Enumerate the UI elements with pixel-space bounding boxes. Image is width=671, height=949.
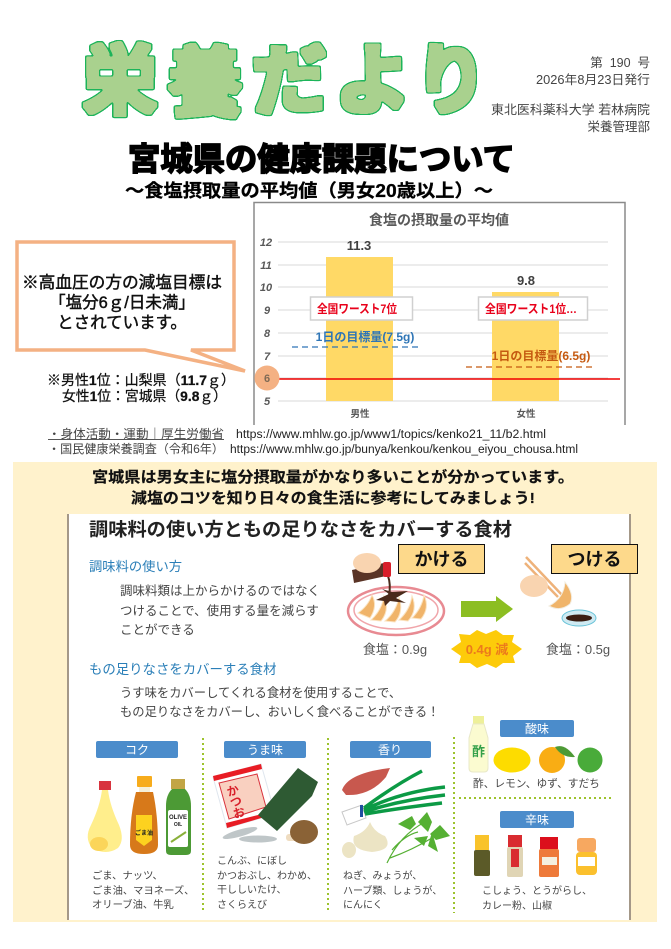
- salt values: [363, 642, 610, 657]
- arrow: green: [461, 596, 513, 622]
- koku foods: ごま油、マヨネーズ、: [92, 884, 194, 897]
- icon: yuzu: [539, 746, 575, 773]
- section: how to use seasoning: [89, 558, 320, 637]
- koku foods: [92, 869, 194, 911]
- spicy foods: カレー粉、山椒: [482, 899, 552, 912]
- koku foods: オリーブ油、牛乳: [92, 898, 174, 911]
- y axis labels: 9: [264, 305, 271, 317]
- icon: kombu: [258, 768, 318, 831]
- icon: katsuobushi pack: つ: [228, 794, 244, 810]
- category: sour: 酸味: [525, 722, 549, 736]
- bar: male 11.3: 11.3: [347, 238, 371, 253]
- rank label: female: 全国ワースト1位…: [485, 301, 577, 316]
- marker circle: 6: 6: [264, 373, 270, 385]
- source links: ・国民健康栄養調査（令和6年）: [48, 441, 224, 456]
- callout: hypertension salt target: [17, 242, 245, 371]
- category: umami: [213, 741, 318, 911]
- target dashed line: male: 1日の目標量(7.5g): [316, 329, 414, 344]
- marker circle: 6: [254, 366, 280, 390]
- salt values: 食塩：0.9g: [363, 642, 427, 657]
- koku foods: ごま、ナッツ、: [92, 869, 163, 882]
- category: aroma: [342, 741, 450, 911]
- icon: black pepper: [474, 835, 490, 876]
- aroma foods: にんにく: [343, 899, 383, 911]
- icon: garlic: [342, 822, 388, 858]
- title: newsletter masthead: [83, 37, 487, 127]
- dotted dividers: [203, 737, 612, 913]
- icon: olive oil: [166, 779, 191, 855]
- advice message: [92, 468, 574, 507]
- source links: [48, 426, 578, 456]
- icon: curry powder: [576, 838, 597, 875]
- bar: male 11.3: [326, 238, 393, 420]
- bar: female 9.8: [492, 273, 559, 420]
- y axis labels: [260, 237, 273, 408]
- icon: sesame oil: ごま油: [135, 829, 153, 837]
- icon: spice jar: [539, 837, 559, 877]
- advice message: 減塩のコツを知り日々の食生活に参考にしてみましょう!: [131, 489, 535, 507]
- icon: olive oil: OLIVE: [169, 815, 187, 821]
- y axis labels: 12: [260, 237, 272, 249]
- issue info: 栄養管理部: [587, 119, 650, 134]
- y axis labels: 10: [260, 282, 273, 294]
- rank label: male: 全国ワースト7位: [317, 301, 397, 316]
- illustration: gyoza with sauce poured: [348, 553, 444, 635]
- callout: hypertension salt target: ※高血圧の方の減塩目標は: [22, 273, 222, 292]
- note: top prefectures: [47, 372, 235, 405]
- category: spicy: [474, 811, 597, 912]
- category: koku: [88, 741, 194, 911]
- issue info: 第 190 号: [590, 55, 650, 70]
- spicy foods: こしょう、とうがらし、: [482, 884, 592, 897]
- sour foods: 酢、レモン、ゆず、すだち: [473, 777, 600, 790]
- category: spicy: 辛味: [525, 813, 549, 827]
- title: newsletter masthead: り: [415, 39, 487, 124]
- umami foods: 干ししいたけ、: [217, 884, 286, 896]
- icon: dried sardines: [222, 825, 277, 842]
- umami foods: かつおぶし、わかめ、: [217, 870, 317, 882]
- source links: https://www.mhlw.go.jp/www1/topics/kenko21_11/b2.html: [236, 429, 546, 441]
- note: top prefectures: ※男性1位：山梨県（11.7ｇ）: [47, 372, 235, 389]
- red line at 6 g: [278, 378, 620, 380]
- icon: herb: [387, 812, 450, 863]
- umami foods: [217, 855, 317, 911]
- icon: lemon: [494, 748, 530, 772]
- badge: 0.4g reduction: 0.4g 減: [466, 642, 508, 657]
- aroma foods: ねぎ、みょうが、: [343, 869, 422, 882]
- bar: female 9.8: 女性: [516, 408, 536, 420]
- section: how to use seasoning: ことができる: [120, 622, 195, 637]
- target dashed line: female: [466, 348, 592, 367]
- label: kakeru: [398, 544, 484, 574]
- source links: ・身体活動・運動｜厚生労働省: [48, 426, 224, 441]
- icon: katsuobushi pack: お: [231, 805, 247, 821]
- category: koku: コク: [125, 743, 149, 757]
- section: how to use seasoning: 調味料の使い方: [89, 558, 182, 574]
- advice message: 宮城県は男女主に塩分摂取量がかなり多いことが分かっています。: [92, 468, 574, 486]
- heading: 宮城県の健康課題について: [128, 141, 515, 177]
- panel: advice background: [13, 462, 657, 922]
- label: kakeru: かける: [414, 550, 468, 570]
- guide title: 調味料の使い方ともの足りなさをカバーする食材: [89, 519, 512, 540]
- icon: mayonnaise: [88, 781, 122, 852]
- category: sour: [469, 716, 602, 790]
- title: newsletter masthead: よ: [335, 39, 411, 124]
- callout: hypertension salt target: 「塩分6ｇ/日未満」: [49, 293, 195, 312]
- section: covering blandness: もの足りなさをカバーし、おいしく食べることができる！: [120, 704, 439, 719]
- icon: katsuobushi pack: [213, 764, 275, 828]
- y axis labels: 11: [260, 260, 272, 272]
- label: tsukeru: [552, 544, 638, 574]
- icon: shiitake: [286, 820, 318, 844]
- icon: katsuobushi pack: か: [225, 783, 241, 799]
- icon: vinegar bottle: 酢: [472, 744, 485, 759]
- icon: olive oil: OIL: [174, 822, 182, 828]
- issue info: [491, 55, 650, 134]
- illustration: gyoza dipped in sauce: [520, 557, 596, 626]
- y axis labels: 7: [264, 351, 271, 363]
- bar chart: salt intake average: [254, 202, 625, 425]
- section: how to use seasoning: 調味料類は上からかけるのではなく: [120, 584, 320, 598]
- umami foods: さくらえび: [217, 899, 267, 911]
- aroma foods: ハーブ類、しょうが、: [343, 884, 442, 897]
- badge: 0.4g reduction: [451, 630, 522, 668]
- title: newsletter masthead: だ: [250, 37, 330, 126]
- title: newsletter masthead: 栄: [83, 40, 157, 125]
- y axis labels: 8: [264, 328, 271, 340]
- aroma foods: [343, 869, 442, 911]
- section: covering blandness: もの足りなさをカバーする食材: [89, 662, 276, 677]
- icon: sudachi: [578, 748, 602, 772]
- icon: green onion: [342, 771, 445, 825]
- rank label: female: [478, 297, 588, 320]
- note: top prefectures: 女性1位：宮城県（9.8ｇ）: [62, 388, 227, 405]
- target dashed line: female: 1日の目標量(6.5g): [492, 348, 590, 363]
- y axis labels: 5: [264, 396, 271, 408]
- target dashed line: male: [292, 329, 418, 347]
- rank label: male: [310, 297, 412, 320]
- section: covering blandness: うす味をカバーしてくれる食材を使用することで、: [120, 685, 401, 700]
- title: newsletter masthead: 養: [168, 42, 242, 127]
- subheading: 〜食塩摂取量の平均値（男女20歳以上）〜: [125, 181, 493, 201]
- bar: female 9.8: 9.8: [517, 273, 535, 288]
- issue info: 東北医科薬科大学 若林病院: [491, 102, 650, 117]
- issue info: 2026年8月23日発行: [536, 73, 650, 87]
- panel: seasoning guide: [67, 514, 638, 920]
- spicy foods: [482, 884, 592, 912]
- callout: hypertension salt target: とされています。: [57, 313, 187, 332]
- source links: https://www.mhlw.go.jp/bunya/kenkou/kenkou_eiyou_chousa.html: [230, 444, 578, 456]
- category: umami: うま味: [247, 743, 283, 757]
- category: aroma: 香り: [378, 743, 402, 757]
- section: covering blandness: [89, 662, 439, 719]
- bar: male 11.3: 男性: [350, 408, 370, 420]
- icon: sesame oil: [130, 776, 158, 854]
- icon: myoga: [342, 768, 390, 795]
- chart title: 食塩の摂取量の平均値: [369, 212, 509, 228]
- icon: chili pepper: [507, 835, 523, 877]
- umami foods: こんぶ、にぼし: [217, 855, 287, 867]
- salt values: 食塩：0.5g: [546, 642, 610, 657]
- section: how to use seasoning: つけることで、使用する量を減らす: [120, 603, 319, 618]
- label: tsukeru: つける: [568, 550, 622, 570]
